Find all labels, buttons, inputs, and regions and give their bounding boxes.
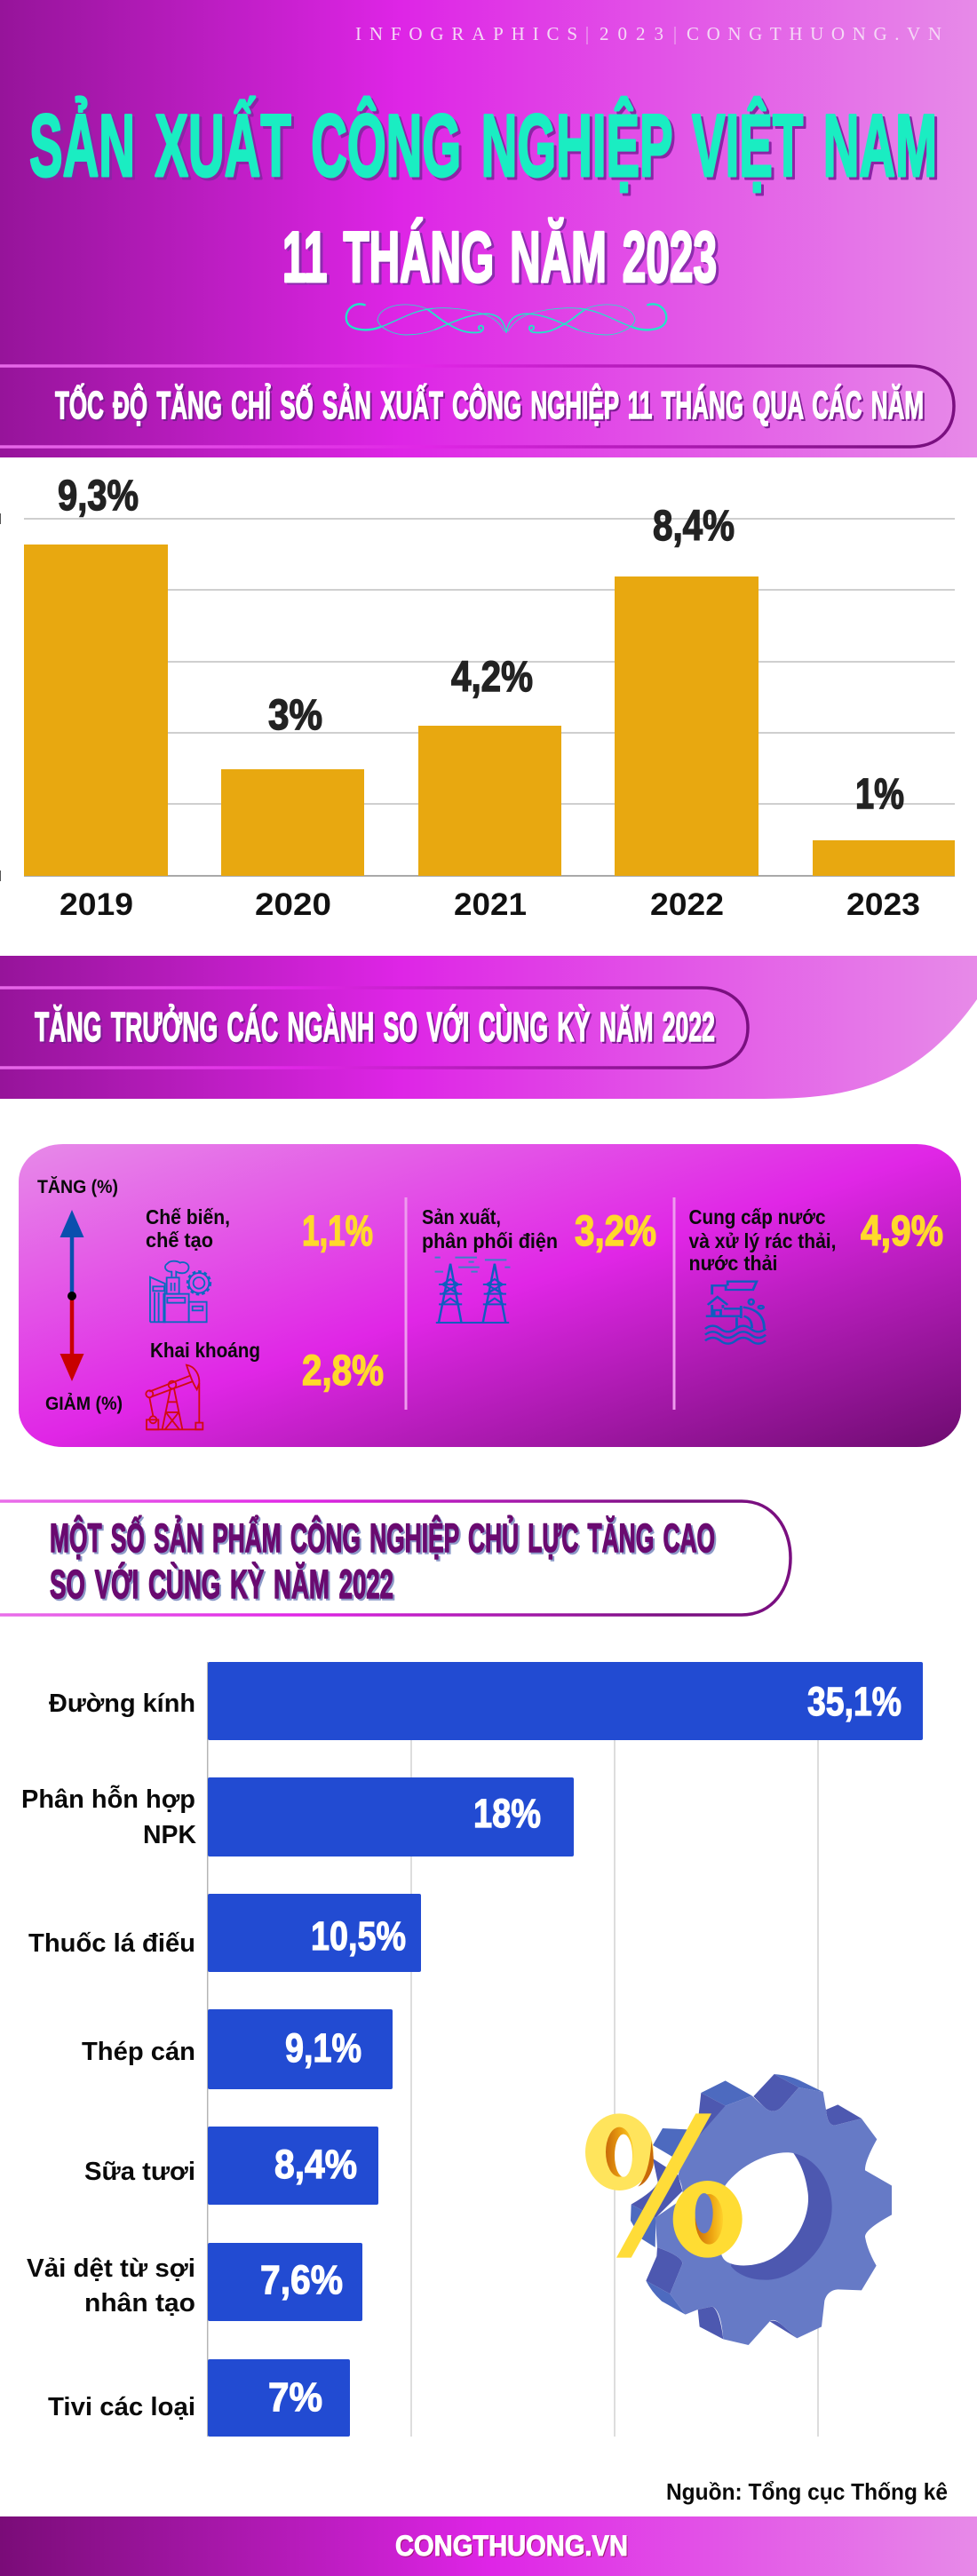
product labels: Vải dệt từ sợi xyxy=(27,2254,195,2283)
sector label: chế biến: Chế biến, xyxy=(146,1205,230,1228)
section 3 heading pill xyxy=(0,1501,790,1615)
top tagline: INFOGRAPHICS xyxy=(355,23,577,44)
header background xyxy=(0,0,977,457)
section 3 heading text xyxy=(50,1515,715,1607)
icon: water treatment xyxy=(705,1282,766,1344)
value: chế biến: 1,1% xyxy=(302,1208,373,1255)
bar chart: key products xyxy=(21,1662,923,2437)
arrow: up and down xyxy=(60,1210,83,1381)
bar values: 18% xyxy=(473,1791,541,1836)
gear back faces xyxy=(631,2074,892,2339)
bar 2019 xyxy=(24,545,168,876)
icon: oil pump xyxy=(146,1365,203,1429)
icon: gear with percent sign xyxy=(585,2074,892,2345)
sector label: sản xuất điện: Sản xuất, xyxy=(422,1205,501,1228)
bar 2023 xyxy=(813,840,955,876)
section 2 banner xyxy=(0,956,977,1099)
value: cấp nước: 4,9% xyxy=(861,1208,943,1255)
bar 2021 xyxy=(418,726,561,876)
bar values: 7% xyxy=(268,2374,322,2420)
value: sản xuất điện: 3,2% xyxy=(575,1208,656,1255)
year labels: 2020 xyxy=(255,887,331,922)
top tagline: 2023 xyxy=(600,23,663,44)
sector label: chế biến: chế tạo xyxy=(146,1228,213,1252)
value 2019: 9,3% xyxy=(58,473,139,520)
value 2021: 4,2% xyxy=(451,654,533,701)
bar: thuốc lá xyxy=(208,1894,421,1972)
product labels: nhân tạo xyxy=(84,2289,195,2318)
sector label: cấp nước: nước thải xyxy=(689,1252,778,1275)
product labels xyxy=(21,1690,196,2421)
bar values xyxy=(260,1679,902,2420)
bar: phân npk xyxy=(208,1777,574,1856)
source note: Nguồn: Tổng cục Thống kê xyxy=(666,2478,948,2505)
column chart: growth rate by year xyxy=(0,473,955,922)
sector label: khai khoáng: Khai khoáng xyxy=(150,1339,260,1362)
bar: sữa tươi xyxy=(208,2127,378,2205)
icon: factory xyxy=(150,1261,210,1322)
year labels: 2019 xyxy=(60,887,133,922)
value 2022: 8,4% xyxy=(653,503,735,550)
sector label: sản xuất điện: phân phối điện xyxy=(422,1229,558,1252)
sector label: cấp nước xyxy=(689,1205,837,1275)
bar 2022 xyxy=(615,576,759,876)
top tagline: CONGTHUONG.VN xyxy=(687,23,941,44)
sector label: sản xuất điện xyxy=(422,1205,558,1252)
bar: đường kính xyxy=(208,1662,923,1740)
bar 2020 xyxy=(221,769,364,876)
bar values: 10,5% xyxy=(311,1913,406,1959)
year labels xyxy=(60,887,920,922)
sector label: chế biến xyxy=(146,1205,230,1252)
bar: vải dệt xyxy=(208,2243,362,2321)
label: giảm: GIẢM (%) xyxy=(45,1394,123,1414)
section 1 heading pill xyxy=(0,366,954,447)
sector label: cấp nước: và xử lý rác thải, xyxy=(689,1229,837,1252)
bar: tivi xyxy=(208,2359,350,2437)
product labels: Sữa tươi xyxy=(84,2158,195,2186)
label: tăng: TĂNG (%) xyxy=(37,1177,118,1197)
bar: thép cán xyxy=(208,2009,393,2089)
icon: power towers xyxy=(435,1258,510,1323)
product labels: Thuốc lá điếu xyxy=(28,1929,195,1958)
ornament xyxy=(346,304,666,335)
gear front face xyxy=(655,2087,892,2345)
section 3 heading text: SO VỚI CÙNG KỲ NĂM 2022 xyxy=(50,1562,393,1607)
footer text: CONGTHUONG.VN xyxy=(395,2530,628,2562)
panel: sector growth xyxy=(19,1144,961,1447)
percent sign xyxy=(585,2113,743,2258)
value: khai khoáng: 2,8% xyxy=(302,1348,384,1395)
gear hole xyxy=(726,2153,832,2280)
top tagline xyxy=(355,23,941,44)
dividers xyxy=(406,1197,674,1410)
year labels: 2021 xyxy=(454,887,527,922)
product labels: Thép cán xyxy=(82,2038,195,2066)
year labels: 2022 xyxy=(650,887,724,922)
product labels: NPK xyxy=(143,1821,196,1849)
year labels: 2023 xyxy=(846,887,920,922)
value 2023: 1% xyxy=(855,771,904,818)
sector label: cấp nước: Cung cấp nước xyxy=(689,1205,826,1228)
bar values: 8,4% xyxy=(274,2142,357,2187)
product labels: Tivi các loại xyxy=(48,2393,195,2421)
value 2020: 3% xyxy=(268,692,322,739)
bar values: 7,6% xyxy=(260,2257,343,2302)
product labels: Phân hỗn hợp xyxy=(21,1784,195,1814)
bar values: 9,1% xyxy=(285,2025,361,2071)
bar values: 35,1% xyxy=(807,1679,902,1724)
product labels: Đường kính xyxy=(49,1690,195,1718)
footer bar xyxy=(0,2516,977,2576)
